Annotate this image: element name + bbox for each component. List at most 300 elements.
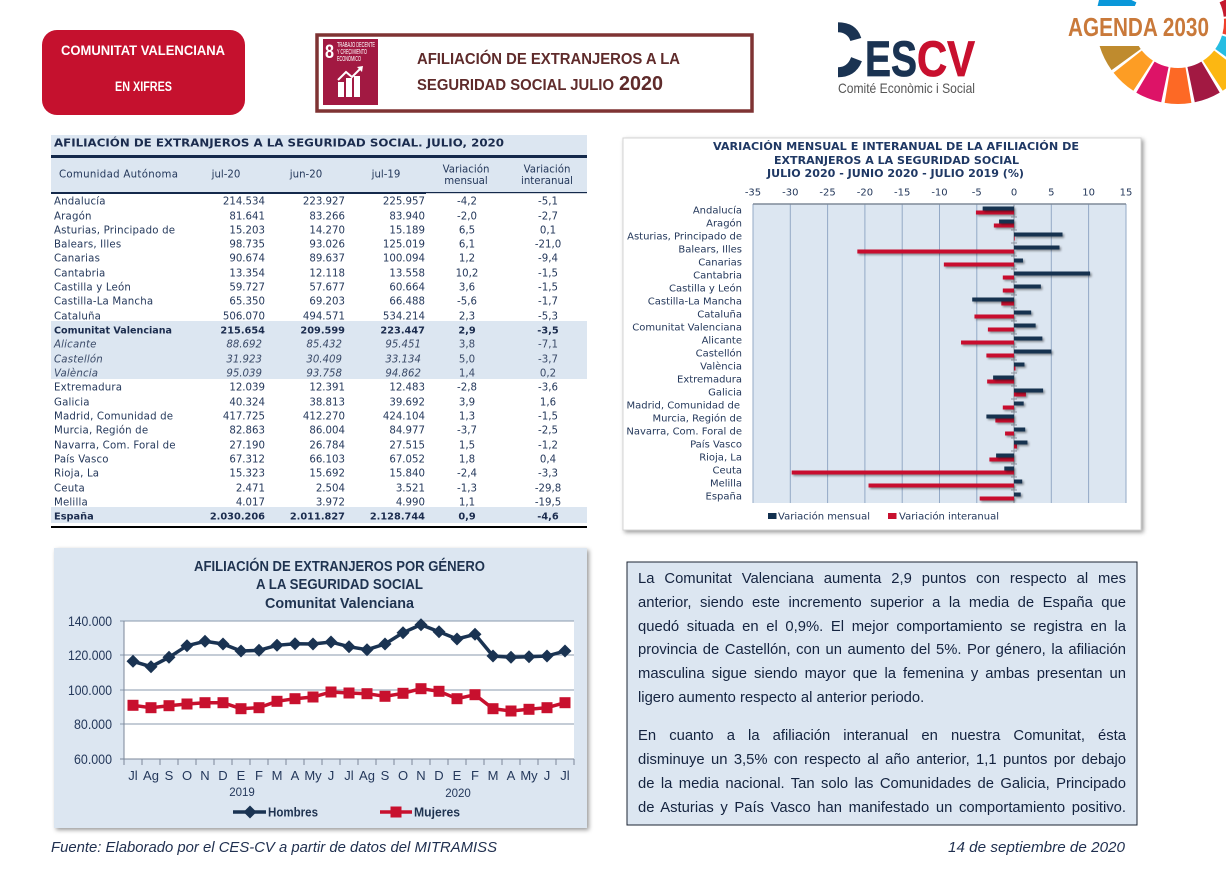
row: Ceuta: Ceuta [54, 484, 85, 494]
row: Melilla: -19,5 [535, 498, 561, 508]
row: Canarias: Canarias [54, 254, 100, 264]
line chart title: Comunitat Valenciana [265, 596, 415, 612]
bars: variación mensual [972, 206, 1090, 496]
row: España [54, 512, 559, 522]
row: Murcia [54, 424, 558, 436]
row: Madrid: 417.725 [223, 412, 265, 422]
row: València [54, 368, 556, 380]
paragraph 1: anterior, siendo este incremento superior a la media de España que [638, 595, 1126, 611]
row: País Vasco: 1,8 [459, 454, 475, 466]
row: Galicia: 39.692 [389, 398, 425, 408]
badge: Comunitat Valenciana en xifres [42, 30, 245, 115]
row: Ceuta [54, 484, 561, 494]
row: Cataluña: 494.571 [303, 312, 345, 322]
line chart month labels: S [381, 768, 390, 783]
row: Castilla y León: 60.664 [389, 282, 425, 294]
bar chart category labels: Navarra, Com. Foral de [626, 426, 742, 438]
bar chart category labels: València [700, 360, 742, 372]
row: Comunitat Valenciana: 2,9 [458, 326, 476, 336]
row: Castilla-La Mancha: -5,6 [457, 296, 477, 308]
line chart month labels: Jl [344, 768, 354, 783]
line chart legend [233, 804, 460, 820]
row: Alicante [53, 340, 558, 350]
row: Castilla y León: Castilla y León [54, 282, 131, 294]
bar chart legend [768, 510, 999, 522]
paragraph 2: de la media nacional. Tan solo las Comunidades de Galicia, Principado [638, 776, 1126, 792]
logo: CES-CV: ES [865, 31, 917, 87]
row: Extremadura: Extremadura [54, 382, 122, 394]
row: Castellón: 30.409 [306, 354, 342, 366]
row: Asturias: 15.189 [389, 226, 425, 236]
row: Rioja: -3,3 [538, 468, 558, 480]
row: Asturias [54, 226, 556, 236]
row: Rioja: 15.692 [309, 468, 345, 480]
row: Extremadura: 12.391 [309, 382, 345, 394]
row: Galicia [54, 398, 556, 408]
paragraph 2: disminuye un 3,5% con respecto al año anterior, 1,1 puntos por debajo [638, 752, 1126, 768]
row: València: 1,4 [459, 368, 475, 380]
row: Andalucía: 225.957 [383, 196, 425, 208]
line chart month labels: O [182, 768, 192, 783]
row: Andalucía [54, 196, 558, 208]
row: València: 95.039 [226, 368, 262, 380]
row: Cataluña: Cataluña [54, 312, 101, 322]
row: España: -4,6 [537, 512, 559, 522]
line chart year labels: 2019 [229, 787, 255, 799]
bar chart category labels: Cantabria [693, 270, 742, 282]
panel: data table [51, 135, 587, 528]
line chart month labels: M [272, 768, 282, 783]
bar chart category labels: Melilla [710, 478, 742, 490]
row: Alicante: Alicante [53, 340, 97, 350]
bar chart category labels: Asturias, Principado de [627, 232, 742, 242]
panel: line chart by gender [54, 548, 587, 828]
bar chart category labels: Aragón [706, 218, 742, 230]
table header row: jun-20 [289, 170, 322, 180]
paragraph 1: quedó situada en el 0,9%. El mejor comportamiento se registra en la [638, 619, 1126, 635]
bar chart x axis labels: -30 [782, 188, 798, 198]
row: Asturias: 14.270 [309, 226, 345, 236]
row: Cantabria: 13.558 [389, 268, 425, 280]
table header row: interanual [521, 176, 573, 187]
row: Murcia: Murcia, Región de [54, 424, 148, 436]
icon: SDG 8 decent work and economic growth: Y CRECIMIENTO [337, 49, 367, 56]
row: Melilla: Melilla [54, 498, 88, 508]
bar chart x axis labels: -35 [745, 188, 761, 198]
row: Canarias: -9,4 [538, 254, 558, 264]
row highlight: España [51, 507, 587, 523]
bar chart legend: Variación interanual [899, 510, 999, 522]
row: España: 0,9 [458, 512, 476, 522]
line chart title: A LA SEGURIDAD SOCIAL [256, 577, 423, 593]
line chart month labels: Ag [143, 768, 159, 783]
table rule bottom [51, 526, 587, 528]
row: Aragón: Aragón [54, 210, 92, 222]
row: Cataluña: 506.070 [223, 312, 265, 322]
row: País Vasco: 67.312 [229, 454, 265, 466]
row: Cantabria: -1,5 [538, 268, 558, 280]
row: Asturias: 15.203 [229, 226, 265, 236]
line chart month labels: D [218, 768, 228, 783]
bar chart category labels: Castellón [696, 348, 742, 360]
row highlight: Comunitat Valenciana group [51, 321, 587, 379]
line chart month labels: O [398, 768, 408, 783]
row: Melilla: 3.972 [316, 498, 345, 508]
line chart month labels: A [507, 768, 516, 783]
line chart y axis labels: 100.000 [68, 682, 112, 698]
row: Aragón [54, 210, 558, 222]
line chart year labels: 2020 [445, 788, 471, 800]
line chart month labels: F [255, 768, 263, 783]
bar chart x axis labels: 10 [1082, 188, 1095, 198]
row: País Vasco: 0,4 [540, 454, 556, 466]
bar chart category labels: España [706, 492, 742, 502]
line chart legend: Hombres [268, 804, 318, 820]
bars: variación interanual [792, 210, 1026, 500]
row: Castilla-La Mancha: 69.203 [309, 296, 345, 308]
row: Alicante: 3,8 [459, 340, 475, 350]
row: Aragón: 81.641 [229, 212, 265, 222]
bar chart category labels: Castilla-La Mancha [648, 296, 742, 308]
logo: CES-CV [838, 22, 976, 93]
line series: Hombres [133, 625, 565, 667]
row: Galicia: 3,9 [459, 398, 475, 408]
bar chart category labels: Balears, Illes [678, 244, 742, 256]
table header row [51, 155, 587, 194]
heading: AFILIACIÓN DE EXTRANJEROS A LA [417, 50, 680, 68]
logo: CES-CV: C [809, 8, 863, 92]
bar chart plot background [753, 204, 1126, 503]
row: Alicante: 95.451 [385, 340, 421, 350]
row: Navarra: 27.515 [389, 440, 425, 452]
row: País Vasco: País Vasco [54, 454, 109, 466]
bar chart category labels: Castilla y León [669, 282, 742, 294]
row: Murcia: -2,5 [538, 426, 558, 436]
paragraph 1: ligero aumento respecto al anterior periodo. [638, 690, 924, 706]
row: Galicia: Galicia [54, 398, 90, 408]
row: Ceuta: -29,8 [535, 484, 561, 494]
line chart month labels: N [416, 768, 426, 783]
row: Aragón: -2,7 [538, 212, 558, 222]
row: Galicia: 40.324 [229, 398, 265, 408]
row: Extremadura: -2,8 [457, 382, 477, 394]
line chart month labels: J [544, 768, 550, 783]
bar chart x axis labels: -10 [931, 188, 948, 198]
row: Madrid: 1,3 [459, 412, 475, 422]
row: España: 2.030.206 [210, 512, 265, 522]
row: Alicante: 85.432 [306, 340, 342, 350]
row: Andalucía: 214.534 [223, 196, 265, 208]
line chart month labels: S [165, 768, 174, 783]
row: Castilla y León: 59.727 [229, 282, 265, 294]
row: Castilla-La Mancha [54, 296, 558, 308]
title box [317, 35, 752, 111]
bar chart title: VARIACIÓN MENSUAL E INTERANUAL DE LA AFILIACIÓN DE [713, 140, 1079, 153]
icon: SDG 8 decent work and economic growth: ECONÓMICO [337, 54, 361, 63]
row: Balears [54, 240, 561, 250]
bar chart legend: Variación mensual [778, 510, 870, 522]
line chart month labels: Ag [359, 768, 375, 783]
table header row: jul-19 [371, 170, 400, 180]
row: Aragón: 83.266 [309, 212, 345, 222]
row: Andalucía: 223.927 [303, 196, 345, 208]
line chart year labels [229, 787, 471, 800]
bar chart title: EXTRANJEROS A LA SEGURIDAD SOCIAL [774, 155, 1019, 167]
row: Andalucía: -5,1 [538, 196, 558, 208]
table title [51, 135, 587, 155]
bar chart category labels: Ceuta [712, 466, 742, 476]
logo: Agenda 2030 wheel [1060, 0, 1226, 112]
row: Cantabria: 13.354 [229, 268, 265, 280]
row: Balears: 93.026 [309, 240, 345, 250]
row: Ceuta: -1,3 [457, 484, 477, 494]
row: País Vasco [54, 454, 556, 466]
heading: 2020 [619, 73, 663, 95]
row: Castellón: Castellón [54, 354, 103, 366]
bar chart x axis labels: -5 [972, 188, 982, 198]
row: País Vasco: 67.052 [389, 454, 425, 466]
bar chart x axis labels: 0 [1011, 188, 1017, 198]
row: Castilla y León: 3,6 [459, 282, 475, 294]
line chart month labels: Jl [560, 768, 570, 783]
row: Cantabria [54, 268, 558, 280]
row: Cataluña: 534.214 [383, 312, 425, 322]
row: Aragón: -2,0 [457, 212, 477, 222]
bar chart category labels: Canarias [698, 258, 742, 268]
row: Madrid: 412.270 [303, 412, 345, 422]
row: Asturias: 6,5 [459, 226, 475, 236]
table header row: Variación [443, 164, 489, 176]
row: Navarra: 1,5 [459, 440, 475, 452]
line chart month labels: J [328, 768, 334, 783]
row: Castilla-La Mancha: -1,7 [538, 296, 558, 308]
row: Castellón: 5,0 [459, 354, 475, 366]
bar chart x axis labels: 5 [1048, 188, 1054, 198]
row: Canarias: 1,2 [459, 254, 475, 264]
bar chart title [713, 140, 1079, 180]
row: Canarias: 90.674 [229, 254, 265, 264]
row: Cataluña: 2,3 [459, 312, 475, 322]
row: València: València [54, 368, 98, 380]
bar chart x axis labels [745, 188, 1132, 198]
line chart plot area [120, 621, 574, 765]
row: Melilla [54, 498, 561, 508]
logo: CES-CV: CV [917, 31, 976, 87]
bar chart category labels: Comunitat Valenciana [632, 322, 742, 334]
row: Castilla-La Mancha: 66.488 [389, 296, 425, 308]
table header row: Comunidad Autónoma [59, 168, 178, 180]
row: Madrid: 424.104 [383, 412, 425, 422]
bar chart x axis labels: -25 [819, 188, 836, 198]
row: Murcia: 86.004 [309, 426, 345, 436]
icon: SDG 8 decent work and economic growth: 8 [325, 42, 334, 63]
row: Castilla-La Mancha: 65.350 [229, 296, 265, 308]
row: España: 2.128.744 [370, 512, 425, 522]
row: Rioja [54, 468, 558, 480]
row: Castellón: 33.134 [385, 354, 421, 366]
row: Melilla: 1,1 [459, 498, 475, 508]
row: Balears: -21,0 [535, 240, 561, 250]
row: Madrid [54, 412, 558, 422]
badge: Comunitat Valenciana en xifres: COMUNITAT VALENCIANA [61, 43, 225, 58]
row: Comunitat Valenciana: 215.654 [220, 326, 265, 336]
line chart title [194, 557, 485, 612]
row: Navarra: -1,2 [538, 440, 558, 452]
row: España: España [54, 512, 94, 522]
panel: bar chart monthly and yearly variation [623, 138, 1141, 530]
bar chart category labels: Rioja, La [699, 452, 742, 464]
row: Comunitat Valenciana [54, 326, 559, 336]
row: València: 0,2 [540, 368, 556, 380]
row: Extremadura: -3,6 [538, 382, 558, 394]
date: 14 de septiembre de 2020 [948, 840, 1125, 856]
icon: SDG 8 decent work and economic growth: TRABAJO DECENTE [337, 42, 375, 49]
row: Balears: Balears, Illes [54, 240, 121, 250]
row: Rioja: -2,4 [457, 468, 477, 480]
row: Cantabria: Cantabria [54, 268, 105, 280]
row: Madrid: Madrid, Comunidad de [54, 412, 173, 422]
row: València: 94.862 [385, 368, 421, 380]
row: Rioja: Rioja, La [54, 468, 99, 480]
paragraph 2 [638, 726, 1128, 826]
line chart month labels: F [471, 768, 479, 783]
line chart y axis labels: 80.000 [74, 716, 112, 732]
row: Alicante: 88.692 [226, 340, 262, 350]
line chart month labels [128, 768, 570, 783]
table header row: mensual [444, 176, 488, 187]
source note: Fuente: Elaborado por el CES-CV a partir de datos del MITRAMISS [51, 840, 497, 856]
line chart month labels: My [520, 768, 538, 783]
row: Madrid: -1,5 [538, 412, 558, 422]
line chart title: AFILIACIÓN DE EXTRANJEROS POR GÉNERO [194, 557, 485, 575]
bar chart category labels [626, 204, 742, 502]
bar chart x axis labels: 15 [1120, 188, 1132, 198]
line chart y axis labels: 120.000 [68, 647, 112, 663]
row: Andalucía: -4,2 [457, 196, 477, 208]
icon: SDG 8 decent work and economic growth [323, 39, 378, 105]
line chart legend: Mujeres [414, 804, 460, 820]
bar chart x axis labels: -20 [857, 188, 873, 198]
row: Ceuta: 2.471 [236, 484, 265, 494]
row: Murcia: -3,7 [457, 426, 477, 436]
panel: commentary text [627, 562, 1137, 826]
row: Andalucía: Andalucía [54, 196, 106, 208]
row: Asturias: 0,1 [540, 226, 556, 236]
row: Castilla y León [54, 282, 558, 294]
paragraph 1 [638, 569, 1128, 719]
paragraph 1: La Comunitat Valenciana aumenta 2,9 puntos con respecto al mes [638, 571, 1126, 587]
row: País Vasco: 66.103 [309, 454, 345, 466]
row: Balears: 98.735 [229, 240, 265, 250]
row: Cataluña: -5,3 [538, 312, 558, 322]
row: Castellón [54, 354, 558, 366]
row: Cataluña [54, 312, 558, 322]
row: Rioja: 15.840 [389, 468, 425, 480]
row: Canarias [54, 254, 558, 264]
row: Canarias: 89.637 [309, 254, 345, 264]
row: Extremadura [54, 382, 558, 394]
row: Murcia: 84.977 [389, 426, 425, 436]
bar chart title: JULIO 2020 - JUNIO 2020 - JULIO 2019 (%) [766, 168, 1024, 180]
heading [417, 50, 680, 95]
row: Comunitat Valenciana: Comunitat Valenciana [54, 326, 172, 336]
line chart month labels: Jl [128, 768, 138, 783]
row: Cantabria: 10,2 [456, 268, 478, 280]
row: Comunitat Valenciana: 223.447 [380, 326, 425, 336]
row: Navarra: Navarra, Com. Foral de [54, 440, 176, 452]
bar chart category labels: Galicia [708, 388, 742, 398]
bar chart category labels: Alicante [702, 336, 742, 346]
bar chart category labels: País Vasco [690, 438, 742, 450]
row: Extremadura: 12.039 [229, 382, 265, 394]
row: Comunitat Valenciana: -3,5 [537, 326, 559, 336]
table title: AFILIACIÓN DE EXTRANJEROS A LA SEGURIDAD SOCIAL. JULIO, 2020 [54, 136, 504, 150]
paragraph 1: provincia de Castellón, con un aumento del 5%. Por género, la afiliación [638, 642, 1126, 658]
row: Navarra: 26.784 [309, 440, 345, 452]
row: Castellón: 31.923 [226, 354, 262, 366]
paragraph 2: En cuanto a la afiliación interanual en nuestra Comunitat, ésta [638, 728, 1126, 744]
line chart month labels: A [291, 768, 300, 783]
row: Balears: 6,1 [459, 240, 475, 250]
line chart y axis labels [68, 613, 112, 767]
row: Melilla: 4.017 [236, 498, 265, 508]
table header row: jul-20 [211, 170, 240, 180]
row: Alicante: -7,1 [538, 340, 558, 350]
bar chart category labels: Extremadura [677, 374, 742, 386]
bar chart category labels: Madrid, Comunidad de [626, 400, 740, 412]
row: Castilla y León: -1,5 [538, 282, 558, 294]
row: Canarias: 100.094 [383, 254, 425, 264]
row: Murcia: 82.863 [229, 426, 265, 436]
paragraph 2: de Asturias y País Vasco han manifestado un comportamiento positivo. [638, 800, 1126, 816]
bar chart x axis labels: -15 [894, 188, 910, 198]
row: Ceuta: 2.504 [316, 484, 345, 494]
badge: Comunitat Valenciana en xifres: EN XIFRES [115, 79, 172, 94]
row: España: 2.011.827 [290, 512, 345, 522]
row: València: 93.758 [306, 368, 343, 380]
row: Balears: 125.019 [383, 240, 425, 250]
row: Extremadura: 12.483 [389, 382, 425, 394]
line chart month labels: N [200, 768, 210, 783]
row: Navarra [54, 440, 558, 452]
row: Navarra: 27.190 [229, 440, 265, 452]
row: Castilla-La Mancha: Castilla-La Mancha [54, 296, 153, 308]
row: Comunitat Valenciana: 209.599 [300, 326, 345, 336]
line chart y axis labels: 140.000 [68, 613, 112, 629]
line chart month labels: D [434, 768, 444, 783]
line chart month labels: My [304, 768, 322, 783]
row: Aragón: 83.940 [389, 212, 425, 222]
line chart month labels: E [237, 768, 246, 783]
line chart month labels: E [453, 768, 462, 783]
line chart month labels: M [488, 768, 498, 783]
bar chart category labels: Murcia, Región de [652, 412, 742, 424]
logo: CES-CV: Comité Econòmic i Social [838, 80, 975, 96]
line series: Mujeres [133, 689, 565, 711]
row: Castellón: -3,7 [538, 354, 558, 366]
paragraph 1: masculina sigue siendo mayor que la femenina y ambas presentan un [638, 666, 1126, 682]
bar chart category labels: Cataluña [697, 310, 742, 320]
line chart y axis labels: 60.000 [74, 751, 112, 767]
heading: SEGURIDAD SOCIAL JULIO [417, 77, 614, 94]
row: Galicia: 38.813 [309, 398, 345, 408]
bar chart category labels: Andalucía [693, 204, 742, 216]
row: Melilla: 4.990 [396, 498, 425, 508]
table header row: Variación [524, 164, 570, 176]
row: Cantabria: 12.118 [309, 268, 345, 280]
row: Rioja: 15.323 [229, 468, 265, 480]
row: Castilla y León: 57.677 [309, 282, 345, 294]
